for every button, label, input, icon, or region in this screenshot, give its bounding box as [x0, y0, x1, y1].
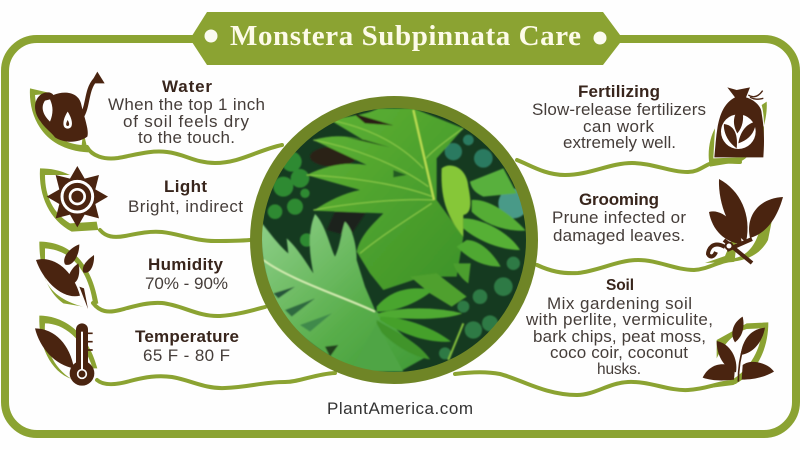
wave connector lines — [87, 145, 740, 395]
text: soil: husks. — [597, 361, 641, 378]
text: grooming: damaged leaves. — [553, 226, 685, 245]
source credit: PlantAmerica.com — [327, 399, 473, 418]
text: fertilizing: extremely well. — [563, 133, 676, 152]
item: humidity — [36, 242, 228, 309]
text: fertilizing: Slow-release fertilizers — [532, 100, 706, 119]
text: water: of soil feels dry — [123, 112, 250, 131]
heading: grooming: Grooming — [579, 190, 659, 209]
icon: leaf with drops — [36, 242, 98, 309]
heading: light: Light — [164, 177, 207, 196]
central photo: monstera leaves — [250, 90, 540, 387]
item: grooming — [552, 179, 783, 263]
icon: leaves and scissors — [705, 179, 783, 263]
text: fertilizing — [532, 100, 706, 152]
text: soil: bark chips, peat moss, — [533, 327, 706, 346]
text: soil: coco coir, coconut — [550, 343, 688, 362]
heading: water: Water — [162, 77, 212, 96]
icon: sun — [40, 166, 108, 232]
text: fertilizing: can work — [583, 117, 654, 136]
item: water — [30, 72, 265, 152]
right leaf — [441, 166, 470, 237]
text: soil — [525, 294, 713, 378]
heading: temperature: Temperature — [135, 327, 239, 346]
text: water: to the touch. — [138, 128, 235, 147]
text: grooming: Prune infected or — [552, 208, 686, 227]
text: humidity: 70% - 90% — [145, 274, 228, 293]
icon: plant in soil — [703, 317, 774, 388]
heading: fertilizing: Fertilizing — [578, 82, 660, 101]
bottom-left leaf — [261, 214, 427, 372]
text: grooming — [552, 208, 686, 245]
item: fertilizing — [532, 82, 767, 167]
title banner — [190, 12, 623, 65]
icon: leaf and thermometer — [35, 316, 97, 386]
text: light: Bright, indirect — [128, 197, 243, 216]
top leaf — [307, 108, 463, 290]
text: soil: Mix gardening soil — [547, 294, 692, 313]
heading: humidity: Humidity — [148, 255, 224, 274]
text: soil: with perlite, vermiculite, — [525, 310, 713, 329]
text: temperature: 65 F - 80 F — [143, 346, 230, 365]
title: Monstera Subpinnata Care — [230, 20, 581, 52]
heading: soil: Soil — [606, 277, 634, 294]
icon: watering can — [30, 72, 105, 152]
text: water: When the top 1 inch — [108, 95, 265, 114]
icon: fertilizer bag — [709, 87, 767, 167]
photo ring — [256, 102, 532, 378]
item: light — [40, 166, 243, 232]
item: soil — [525, 277, 774, 388]
text: water — [108, 95, 265, 147]
item: temperature — [35, 316, 239, 386]
